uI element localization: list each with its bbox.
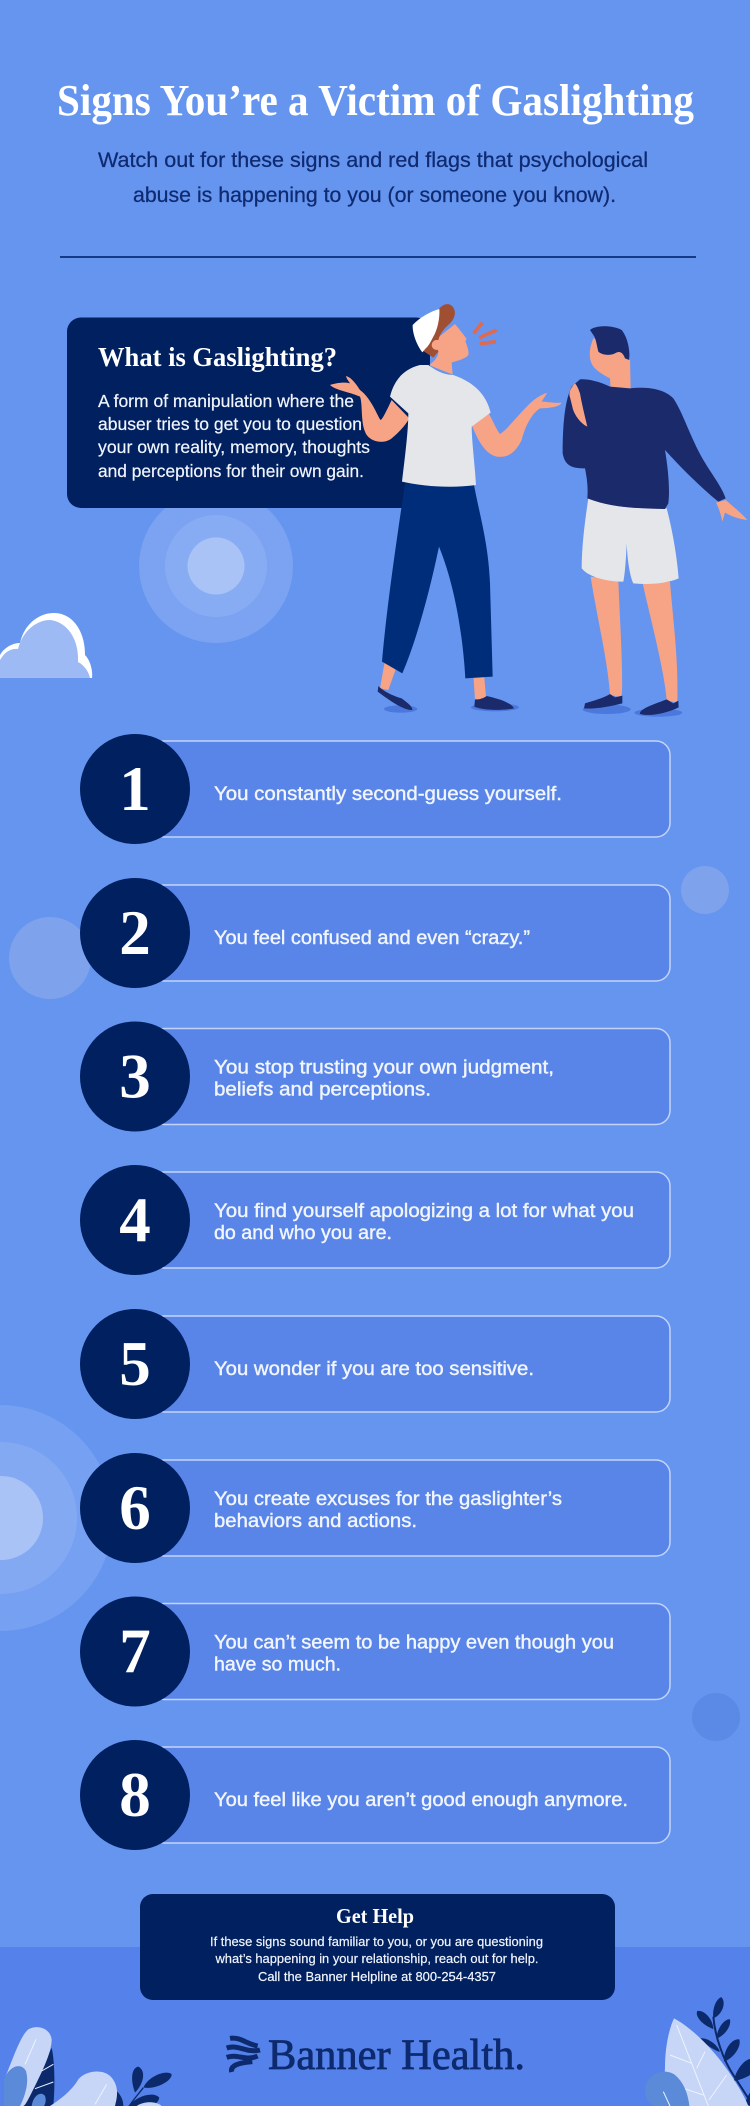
panel heading: What is Gaslighting? xyxy=(98,342,337,372)
title: Signs You’re a Victim of Gaslighting xyxy=(57,76,694,125)
get help body: If these signs sound familiar to you, or you are questioning xyxy=(210,1934,543,1949)
sign 1: 1 xyxy=(119,754,151,824)
sign 2: 2 xyxy=(119,898,151,968)
panel body text: abuser tries to get you to question xyxy=(98,414,362,434)
get help body: what’s happening in your relationship, reach out for help. xyxy=(215,1951,538,1966)
icon: banner waves xyxy=(227,2038,260,2072)
decorative concentric circles left xyxy=(0,1405,113,1631)
panel: what is gaslighting xyxy=(67,318,430,508)
sign 6: You create excuses for the gaslighter’s xyxy=(214,1489,562,1510)
logo: Banner Health: Banner Health. xyxy=(268,2032,525,2079)
sign 3: beliefs and perceptions. xyxy=(214,1080,431,1100)
icon: shout marks xyxy=(474,323,497,344)
sign 5: 5 xyxy=(119,1329,151,1399)
person: listening man xyxy=(563,326,747,717)
sign 7: You can’t seem to be happy even though you xyxy=(214,1632,614,1654)
illustration: two people arguing xyxy=(330,304,747,717)
subtitle xyxy=(98,149,648,207)
get help heading: Get Help xyxy=(336,1904,414,1928)
sign 6 xyxy=(80,1453,670,1563)
icon: cloud xyxy=(0,613,92,678)
plants: bottom left xyxy=(4,2027,172,2106)
sign 4: 4 xyxy=(119,1185,151,1255)
panel: get help xyxy=(140,1894,615,2000)
sign 3: 3 xyxy=(119,1042,151,1112)
panel body text: your own reality, memory, thoughts xyxy=(98,437,370,457)
decorative circles xyxy=(9,866,740,1741)
sign 4: do and who you are. xyxy=(214,1223,392,1244)
plants: bottom right xyxy=(645,1997,750,2106)
sign 6: 6 xyxy=(119,1473,151,1543)
sign 5: You wonder if you are too sensitive. xyxy=(214,1359,534,1380)
decorative concentric circles xyxy=(139,489,293,643)
sign 3: You stop trusting your own judgment, xyxy=(214,1058,554,1078)
sign 4: You find yourself apologizing a lot for what you xyxy=(214,1201,634,1222)
sign 4 xyxy=(80,1165,670,1275)
panel body text: and perceptions for their own gain. xyxy=(98,461,364,481)
sign 8 xyxy=(80,1740,670,1850)
get help body xyxy=(210,1934,543,1984)
sign 1 xyxy=(80,734,670,844)
sign 8: You feel like you aren’t good enough anymore. xyxy=(214,1790,628,1811)
sign 7 xyxy=(80,1596,670,1706)
panel body text xyxy=(98,391,370,481)
sign 3 xyxy=(80,1022,670,1132)
subtitle: Watch out for these signs and red flags that psychological xyxy=(98,149,648,172)
sign 6: behaviors and actions. xyxy=(214,1511,417,1532)
panel body text: A form of manipulation where the xyxy=(98,391,354,411)
sign 2: You feel confused and even “crazy.” xyxy=(214,928,530,949)
person: speaking man xyxy=(330,304,562,713)
get help body: Call the Banner Helpline at 800-254-4357 xyxy=(258,1969,496,1984)
subtitle: abuse is happening to you (or someone you know). xyxy=(133,184,616,207)
sign 7: have so much. xyxy=(214,1654,341,1676)
sign 7: 7 xyxy=(119,1616,151,1686)
sign 2 xyxy=(80,878,670,988)
sign 1: You constantly second-guess yourself. xyxy=(214,784,562,805)
sign 5 xyxy=(80,1309,670,1419)
sign 8: 8 xyxy=(119,1760,151,1830)
